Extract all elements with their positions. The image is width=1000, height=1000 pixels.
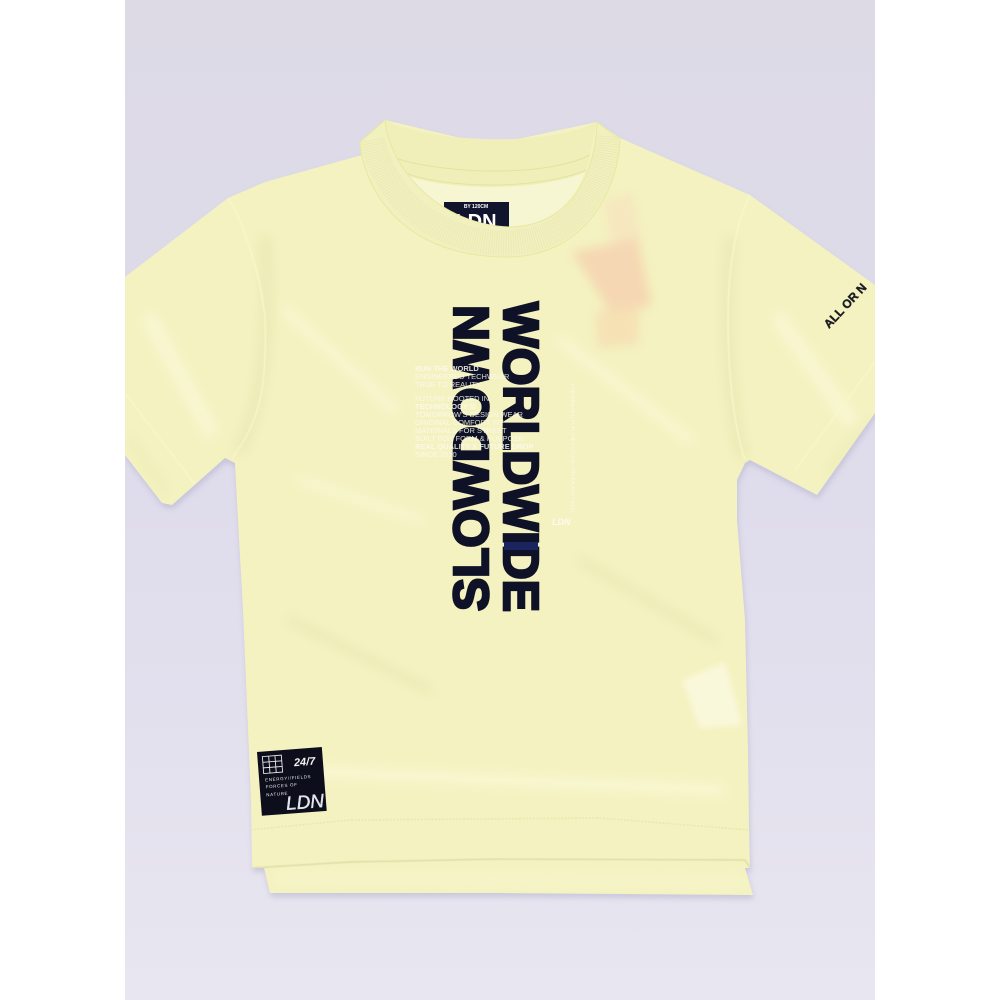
front hem edge <box>252 859 750 868</box>
hem patch: 24/7 <box>293 756 317 769</box>
hem patch: LDN <box>285 791 325 815</box>
hem patch <box>257 747 327 817</box>
neck label: BY 120CM <box>464 204 488 210</box>
print: white small text block: REAL QUALITY X FUTURE DROP <box>415 442 533 451</box>
shirt body <box>125 120 875 895</box>
print: white small text block: MATERIALS FOR STREET <box>415 426 507 435</box>
collar rib <box>360 120 620 257</box>
white side margins <box>0 0 125 1000</box>
print: white small text block: TRUE TO REALITY <box>415 380 481 389</box>
print: white small text block: RUN THE WORLD <box>415 364 479 373</box>
hem patch: FORCES OF <box>266 782 298 789</box>
sleeve and armhole seams <box>194 226 856 485</box>
inside back of shirt <box>396 165 585 228</box>
print: white small text block: ENGINEERED TECHWEAR <box>415 372 510 381</box>
print: white small text block <box>415 364 533 459</box>
print: vertical white text: ENGINEERED FOR THE FUTURE / 24 HOURS / FIELD <box>569 384 575 513</box>
neck label: LDN <box>455 211 497 233</box>
print: white small text block: TECHNOLOGY /// <box>415 402 477 411</box>
print: white small text block: TOMORROW'S DESIGN WEAR <box>415 410 524 419</box>
print: white small text block: BUILT FOR FORM & PURPOSE <box>415 434 524 443</box>
print: SLOWDOWN: SLOWDOWN <box>445 305 499 611</box>
print: blue I highlight <box>504 542 538 550</box>
inner back collar <box>385 120 597 187</box>
soft folds and shading <box>144 310 856 796</box>
hem patch: NATURE <box>266 791 288 797</box>
hem stitching <box>250 818 749 830</box>
patch grid icon <box>262 755 283 774</box>
hem patch: ENERGY//FIELDS <box>265 774 311 782</box>
print: white small text block: SINCE 2020 <box>415 450 457 459</box>
t-shirt <box>125 120 875 895</box>
print: white small text block: ORIGINAL COMFORT FIT <box>415 418 504 427</box>
sleeve print: ALL OR N <box>821 281 869 331</box>
peach show-through tag <box>572 193 652 348</box>
print: white small text block: FUTURE ROOTED IN <box>415 394 489 403</box>
print: small white logo: LDN <box>552 517 571 527</box>
neck label <box>444 202 509 233</box>
photo background <box>125 0 875 1000</box>
pale show-through patch <box>682 662 742 728</box>
collar stitching <box>393 155 590 185</box>
print: WORLDWIDE: WORLDWIDE <box>493 302 547 612</box>
shirt shadow <box>126 124 876 899</box>
